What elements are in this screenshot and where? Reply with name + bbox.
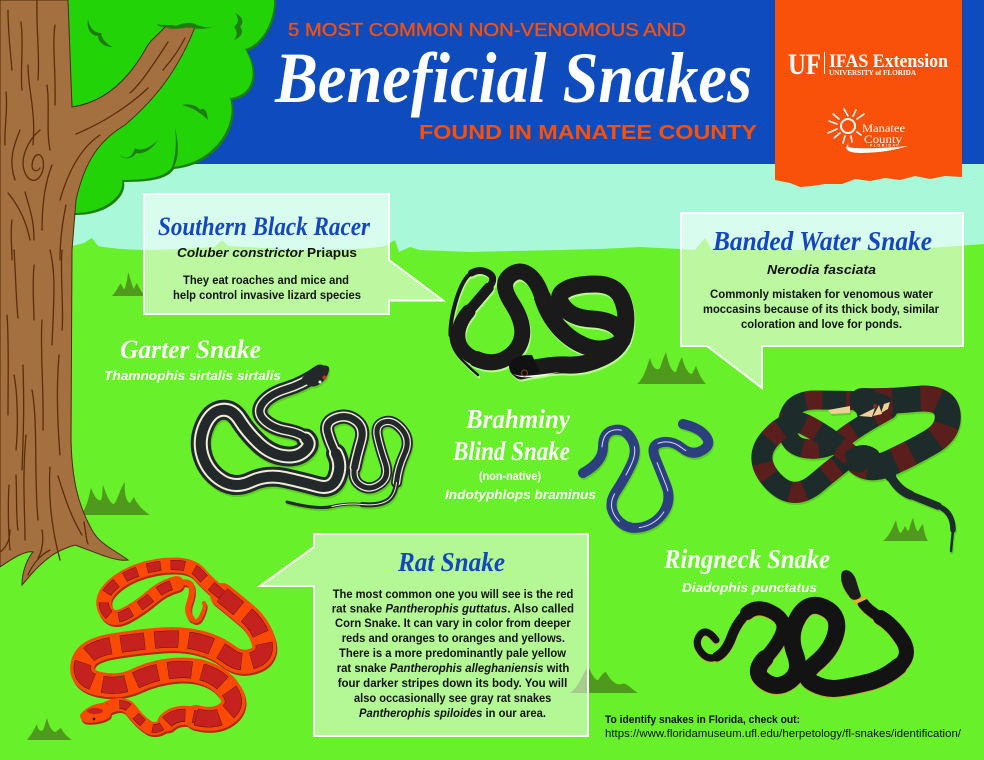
snake head bbox=[828, 390, 892, 418]
snake: Garter Snake bbox=[201, 365, 407, 508]
snake: Rat Snake bbox=[80, 565, 264, 729]
footnote: identification link bbox=[605, 714, 962, 740]
snake: Southern Black Racer bbox=[450, 270, 626, 377]
footnote: identification link: To identify snakes in Florida, check out: bbox=[605, 714, 800, 726]
snake: Banded Water Snake bbox=[762, 390, 953, 551]
callout: Southern Black Racer: help control invasive lizard species bbox=[173, 290, 361, 302]
callout: Banded Water Snake: Commonly mistaken for venomous water bbox=[710, 287, 933, 301]
label: Ringneck Snake: Diadophis punctatus bbox=[682, 580, 817, 595]
label: Garter Snake bbox=[104, 335, 281, 383]
callout: Rat Snake: reds and oranges to oranges and yellows. bbox=[342, 632, 565, 645]
label: Ringneck Snake: Ringneck Snake bbox=[663, 544, 830, 574]
label: Brahminy Blind Snake: Blind Snake bbox=[452, 436, 570, 466]
orange logo panel bbox=[775, 0, 962, 187]
Manatee County logo: FLORIDA bbox=[870, 144, 895, 148]
UF IFAS Extension logo: UNIVERSITY of FLORIDA bbox=[829, 69, 916, 77]
grass tufts bbox=[27, 272, 928, 740]
callout: Rat Snake: also occasionally see gray rat snakes bbox=[354, 692, 552, 705]
callout: Rat Snake: four darker stripes down its body. You will bbox=[338, 677, 567, 690]
title bbox=[274, 19, 758, 144]
callout: Southern Black Racer: They eat roaches and mice and bbox=[183, 275, 349, 287]
label: Brahminy Blind Snake: (non-native) bbox=[479, 469, 541, 483]
title: FOUND IN MANATEE COUNTY bbox=[419, 122, 758, 144]
title: 5 MOST COMMON NON-VENOMOUS AND bbox=[288, 19, 686, 40]
callout: Rat Snake bbox=[260, 534, 588, 736]
label: Brahminy Blind Snake: Indotyphlops braminus bbox=[445, 487, 596, 502]
tree foliage bbox=[60, 0, 276, 215]
tree trunk and branch bbox=[0, 0, 216, 585]
callout: Banded Water Snake: coloration and love for ponds. bbox=[741, 317, 902, 331]
callout: Southern Black Racer: Southern Black Racer bbox=[158, 212, 371, 241]
snake head bbox=[80, 703, 111, 723]
callout: Rat Snake: Rat Snake bbox=[397, 547, 505, 577]
snake: Ringneck Snake bbox=[697, 570, 906, 688]
Manatee County logo: Manatee bbox=[862, 123, 905, 135]
label: Ringneck Snake bbox=[663, 544, 830, 595]
callout: Rat Snake: rat snake Pantherophis alleghaniensis with bbox=[337, 662, 569, 675]
callout: Rat Snake: rat snake Pantherophis guttatus. Also called bbox=[332, 602, 574, 616]
callout: Rat Snake: Corn Snake. It can vary in color from deeper bbox=[335, 617, 571, 630]
snake: Brahminy Blind Snake bbox=[583, 424, 708, 528]
callout: Rat Snake: Pantherophis spiloides in our area. bbox=[359, 707, 546, 720]
Manatee County logo bbox=[828, 109, 908, 153]
snake head bbox=[302, 365, 329, 387]
label: Garter Snake: Thamnophis sirtalis sirtalis bbox=[104, 368, 281, 383]
tree bbox=[0, 0, 276, 585]
UF IFAS Extension logo: IFAS Extension bbox=[829, 52, 949, 72]
UF IFAS Extension logo: UF bbox=[788, 48, 821, 81]
callout: Rat Snake: The most common one you will see is the red bbox=[333, 588, 573, 601]
label: Garter Snake: Garter Snake bbox=[120, 335, 261, 364]
label: Brahminy Blind Snake: Brahminy bbox=[465, 404, 571, 434]
callout: Banded Water Snake bbox=[681, 213, 963, 388]
Manatee County logo: County bbox=[864, 134, 902, 146]
callout: Banded Water Snake: Banded Water Snake bbox=[712, 226, 932, 256]
callout: Banded Water Snake: moccasins because of its thick body, similar bbox=[703, 302, 939, 316]
callout: Banded Water Snake: Nerodia fasciata bbox=[767, 262, 876, 277]
label: Brahminy Blind Snake bbox=[445, 404, 596, 502]
snake head bbox=[509, 355, 560, 377]
UF IFAS Extension logo bbox=[788, 48, 949, 81]
snake head and ring bbox=[841, 570, 867, 604]
footnote: identification link: https://www.floridamuseum.ufl.edu/herpetology/fl-snakes/identification/ bbox=[605, 728, 962, 740]
title: Beneficial Snakes bbox=[274, 38, 752, 118]
callout: Southern Black Racer: Coluber constrictor Priapus bbox=[177, 245, 357, 260]
callout: Southern Black Racer bbox=[144, 194, 443, 314]
callout: Rat Snake: There is a more predominantly pale yellow bbox=[339, 647, 567, 660]
